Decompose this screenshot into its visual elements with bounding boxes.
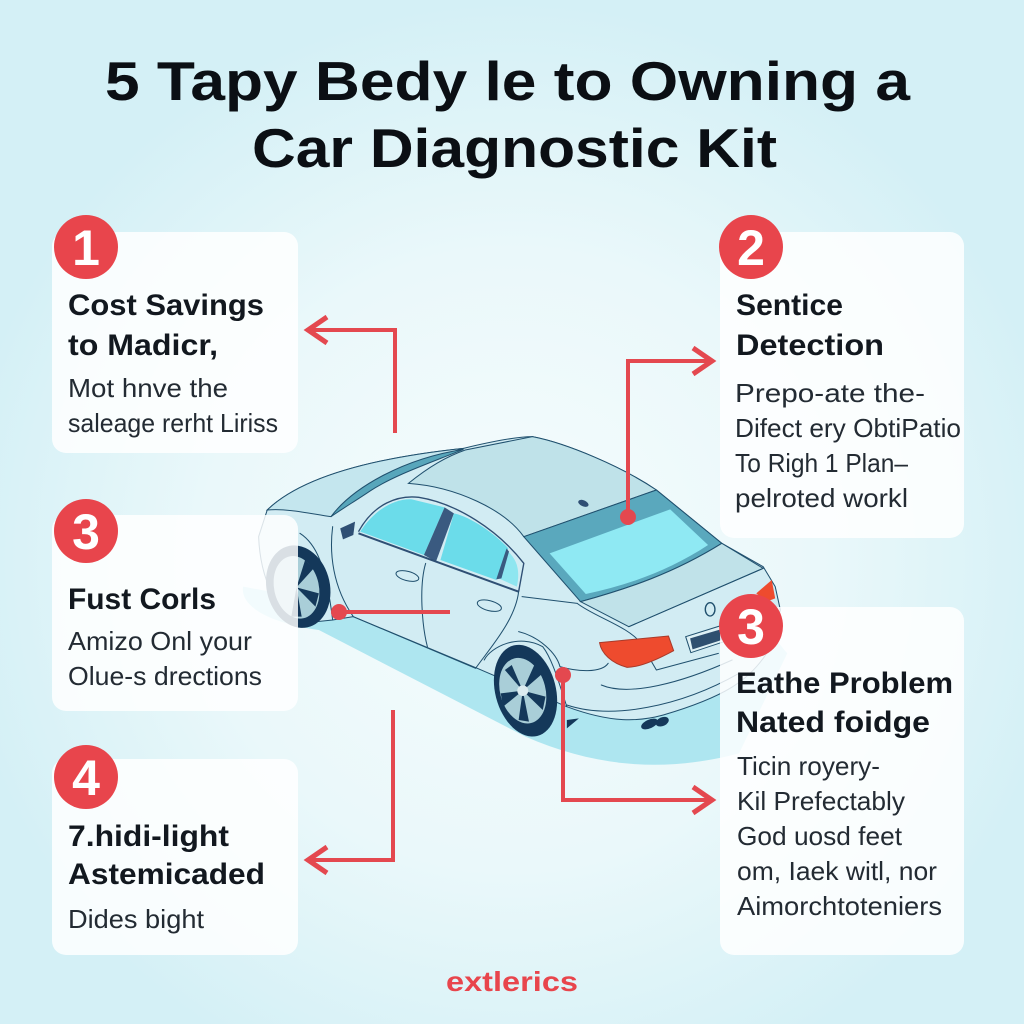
- panel: step 1: Mot hnve the: [68, 373, 228, 403]
- panel: step 3 left: Amizo Onl your: [68, 626, 252, 656]
- hood: [267, 448, 464, 517]
- panel: step 3 right: Aimorchtoteniers: [737, 891, 942, 921]
- panel: step 2: Difect ery ObtiPatio: [735, 413, 961, 443]
- roof: [408, 437, 656, 537]
- arrow: to step 3 right: [555, 667, 712, 813]
- trunk: [581, 543, 763, 627]
- panel: step 4: 7.hidi-light: [68, 820, 229, 853]
- panel: step 1: to Madicr,: [68, 329, 218, 362]
- arrow: to step 2: [620, 348, 712, 525]
- panel: step 3 right: Eathe Problem: [736, 667, 953, 700]
- panel: step 3 left: 3: [72, 504, 100, 560]
- panel: step 2: Prepo-ate the-: [735, 378, 925, 408]
- rear wheel: [484, 638, 579, 743]
- panel: step 3 right: om, Iaek witl, nor: [737, 856, 937, 886]
- title: 5 Tapy Bedy le to Owning a: [105, 50, 910, 112]
- panel: step 4: 4: [72, 750, 100, 806]
- panel: step 3 left: Fust Corls: [68, 583, 216, 616]
- panel: step 2: 2: [737, 220, 765, 276]
- title: Car Diagnostic Kit: [252, 117, 777, 179]
- front wheel: [258, 540, 338, 634]
- panel: step 4: Astemicaded: [68, 858, 265, 891]
- pointer: front door to step 3 left: [331, 604, 450, 620]
- panel: step 2: pelroted workl: [735, 483, 908, 513]
- panel: step 1: Cost Savings: [68, 289, 264, 322]
- side windows: [358, 497, 524, 592]
- panel: step 2: Detection: [736, 329, 884, 362]
- panel: step 3 right: [719, 594, 964, 955]
- footer brand: extlerics: [446, 966, 578, 997]
- panel: step 3 right: God uosd feet: [737, 821, 903, 851]
- panel: step 2: Sentice: [736, 289, 843, 322]
- arrow: to step 4: [308, 710, 393, 873]
- panel: step 3 right: 3: [737, 599, 765, 655]
- panel: step 1: [52, 215, 298, 453]
- panel: step 3 right: Kil Prefectably: [737, 786, 905, 816]
- windshield: [331, 449, 464, 517]
- car body: [259, 437, 780, 720]
- panel: step 1: saleage rerht Liriss: [68, 408, 278, 438]
- panel: step 3 right: Ticin royery-: [737, 751, 880, 781]
- exhaust pipes: [639, 715, 670, 732]
- title: [105, 50, 910, 179]
- panel: step 1: 1: [72, 220, 100, 276]
- panel: step 3 right: Nated foidge: [736, 706, 930, 739]
- panel: step 4: [52, 745, 298, 955]
- ground shadow: [243, 587, 787, 765]
- panel: step 2: To Righ 1 Plan–: [735, 448, 909, 478]
- panel: step 2: [719, 215, 964, 538]
- panel: step 3 left: Olue-s drections: [68, 661, 262, 691]
- panel: step 4: Dides bight: [68, 904, 205, 934]
- tail lights: [600, 580, 775, 667]
- panel: step 3 left: [52, 499, 298, 711]
- illustration: sedan car with ground shadow: [243, 437, 787, 765]
- body lines and door handles: [300, 498, 763, 711]
- rear window: [524, 490, 722, 602]
- license plate and badge: [686, 603, 739, 653]
- arrow: to step 1: [308, 317, 395, 433]
